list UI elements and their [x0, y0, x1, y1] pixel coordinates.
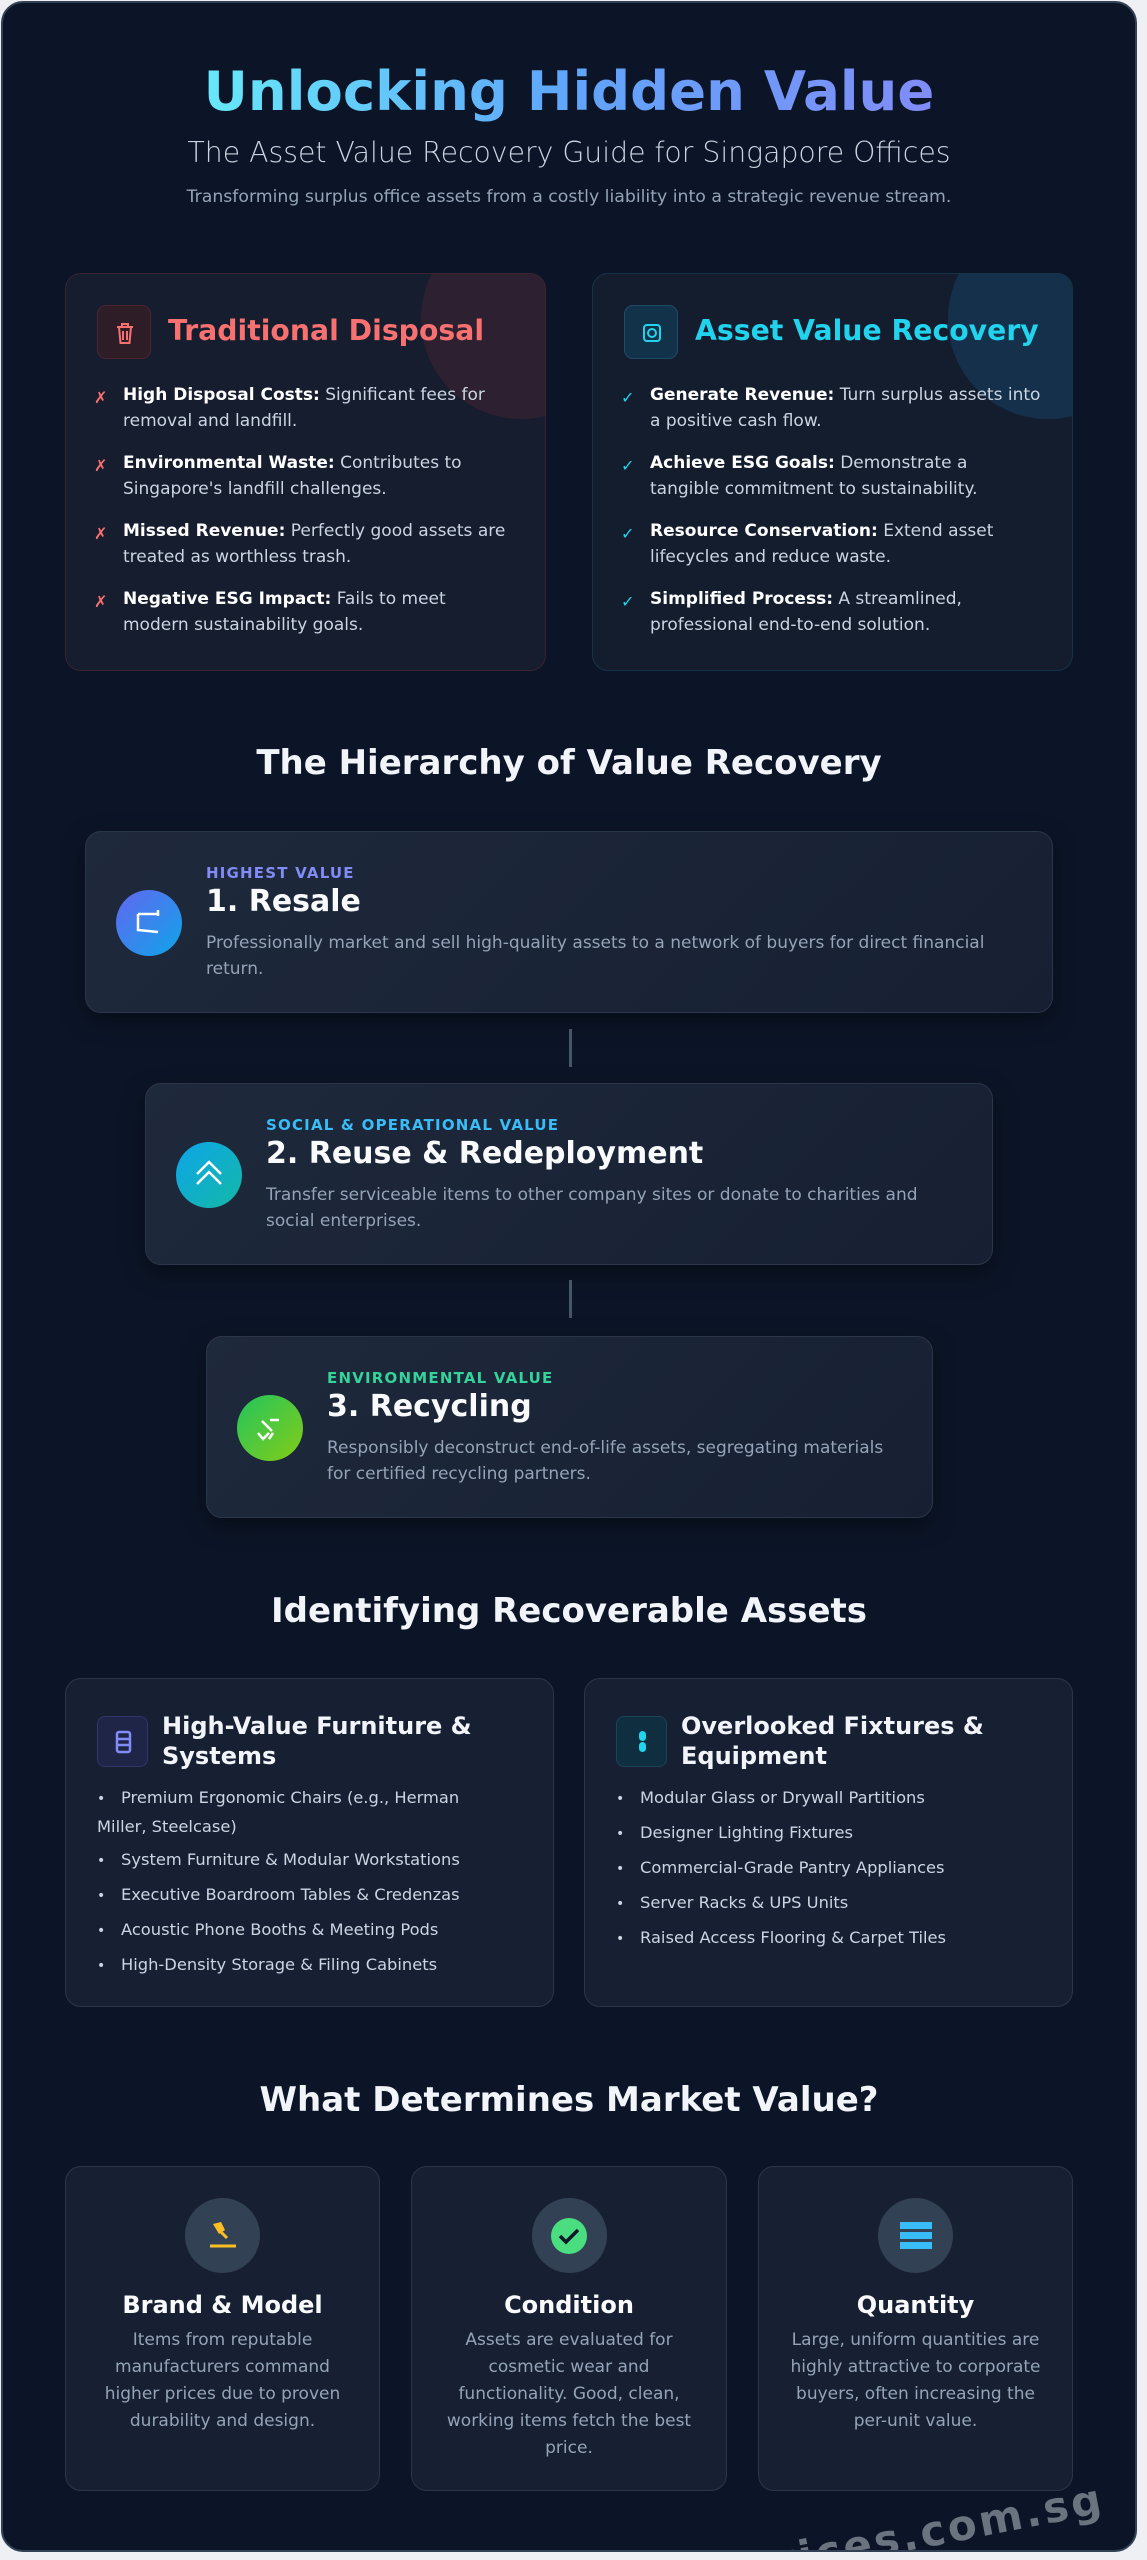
list: ✗	[94, 388, 107, 407]
card: condition: Assets are evaluated for cosmetic wear and functionality. Good, clean, working items fetch the best price.	[447, 2330, 691, 2458]
list: High Disposal Costs: Significant fees for removal and landfill.	[123, 385, 485, 431]
tier 1: resale	[85, 831, 1053, 1013]
tier 3: recycling	[206, 1336, 933, 1518]
tier 3: recycling: Responsibly deconstruct end-of-life assets, segregating materials	[327, 1438, 883, 1458]
heading: Asset Value Recovery	[695, 314, 1039, 347]
tier 3: recycling: ENVIRONMENTAL VALUE	[327, 1369, 553, 1387]
list: ✗	[94, 456, 107, 475]
list: ✓	[621, 524, 634, 543]
list: Environmental Waste: Contributes to Singapore's landfill challenges.	[123, 453, 462, 499]
card: quantity	[758, 2166, 1073, 2491]
list: Generate Revenue: Turn surplus assets into a positive cash flow.	[650, 385, 1040, 431]
panel: fixtures: Modular Glass or Drywall Partitions	[640, 1788, 925, 1807]
icon: recycling	[237, 1395, 303, 1461]
tier 2: reuse	[145, 1083, 993, 1265]
icon: trash	[97, 305, 151, 359]
panel: fixtures: Raised Access Flooring & Carpet Tiles	[640, 1928, 946, 1947]
panel: asset value recovery	[592, 273, 1073, 671]
list: Resource Conservation: Extend asset lifecycles and reduce waste.	[650, 521, 993, 567]
icon: stack	[878, 2198, 953, 2273]
card: condition	[411, 2166, 727, 2491]
list: Negative ESG Impact: Fails to meet	[123, 589, 446, 609]
icon: gavel	[185, 2198, 260, 2273]
panel: fixtures: Server Racks & UPS Units	[640, 1893, 848, 1912]
list: modern sustainability goals.	[123, 615, 363, 635]
list: ✓	[621, 592, 634, 611]
tier 1: resale: Professionally market and sell high-quality assets to a network of buyers for direct financial return.	[206, 933, 984, 979]
icon: check	[532, 2198, 606, 2273]
list	[621, 385, 1040, 635]
panel: furniture: Premium Ergonomic Chairs (e.g., Herman Miller, Steelcase)	[97, 1788, 459, 1836]
heading: hierarchy: The Hierarchy of Value Recovery	[256, 743, 882, 783]
card: brand	[65, 2166, 380, 2491]
panel: fixtures: Designer Lighting Fixtures	[640, 1823, 853, 1842]
card: condition: Condition	[504, 2291, 634, 2319]
heading: identifying: Identifying Recoverable Assets	[271, 1591, 867, 1631]
panel: furniture: High-Density Storage & Filing Cabinets	[121, 1955, 437, 1974]
list: Simplified Process: A streamlined, professional end-to-end solution.	[650, 589, 962, 635]
title: Unlocking Hidden Value	[204, 59, 934, 123]
icon: fixture	[616, 1716, 667, 1767]
icon: resale	[116, 890, 182, 956]
heading: market value: What Determines Market Value?	[260, 2080, 878, 2120]
card: brand: Items from reputable manufacturers command higher prices due to proven durability and design.	[105, 2330, 340, 2431]
panel: furniture	[65, 1678, 554, 2007]
panel: furniture: Executive Boardroom Tables & Credenzas	[121, 1885, 460, 1904]
tier 2: reuse: 2. Reuse & Redeployment	[266, 1136, 703, 1171]
list	[94, 385, 505, 635]
panel: fixtures	[584, 1678, 1073, 2007]
icon: recovery	[624, 305, 678, 359]
panel: fixtures: Commercial-Grade Pantry Appliances	[640, 1858, 945, 1877]
list: Achieve ESG Goals: Demonstrate a	[650, 453, 967, 473]
tier 3: recycling: for certified recycling partners.	[327, 1464, 591, 1484]
tier 1: resale: 1. Resale	[206, 884, 361, 919]
list: ✓	[621, 388, 634, 407]
heading: Traditional Disposal	[168, 314, 484, 347]
list: ✗	[94, 592, 107, 611]
icon: reuse	[176, 1142, 242, 1208]
panel: furniture: High-Value Furniture & Systems	[162, 1712, 472, 1770]
card: brand: Brand & Model	[122, 2291, 323, 2319]
subtitle: The Asset Value Recovery Guide for Singapore Offices	[188, 136, 950, 169]
tier 1: resale: HIGHEST VALUE	[206, 864, 355, 882]
list: tangible commitment to sustainability.	[650, 479, 978, 499]
icon: cabinet	[97, 1716, 148, 1767]
list: ✗	[94, 524, 107, 543]
tier 3: recycling: 3. Recycling	[327, 1389, 532, 1424]
list: Missed Revenue: Perfectly good assets are treated as worthless trash.	[123, 521, 505, 567]
panel: furniture: System Furniture & Modular Workstations	[121, 1850, 460, 1869]
tagline: Transforming surplus office assets from a costly liability into a strategic revenue stream.	[187, 187, 951, 207]
panel: furniture: Acoustic Phone Booths & Meeting Pods	[121, 1920, 438, 1939]
list: ✓	[621, 456, 634, 475]
panel: fixtures: Overlooked Fixtures & Equipment	[681, 1712, 984, 1770]
card: quantity: Quantity	[857, 2291, 974, 2319]
tier 2: reuse: Transfer serviceable items to other company sites or donate to charities and social enterprises.	[266, 1185, 918, 1231]
card: quantity: Large, uniform quantities are highly attractive to corporate buyers, often increasing the per-unit value.	[790, 2330, 1040, 2431]
tier 2: reuse: SOCIAL & OPERATIONAL VALUE	[266, 1116, 559, 1134]
panel: traditional disposal	[65, 273, 546, 671]
